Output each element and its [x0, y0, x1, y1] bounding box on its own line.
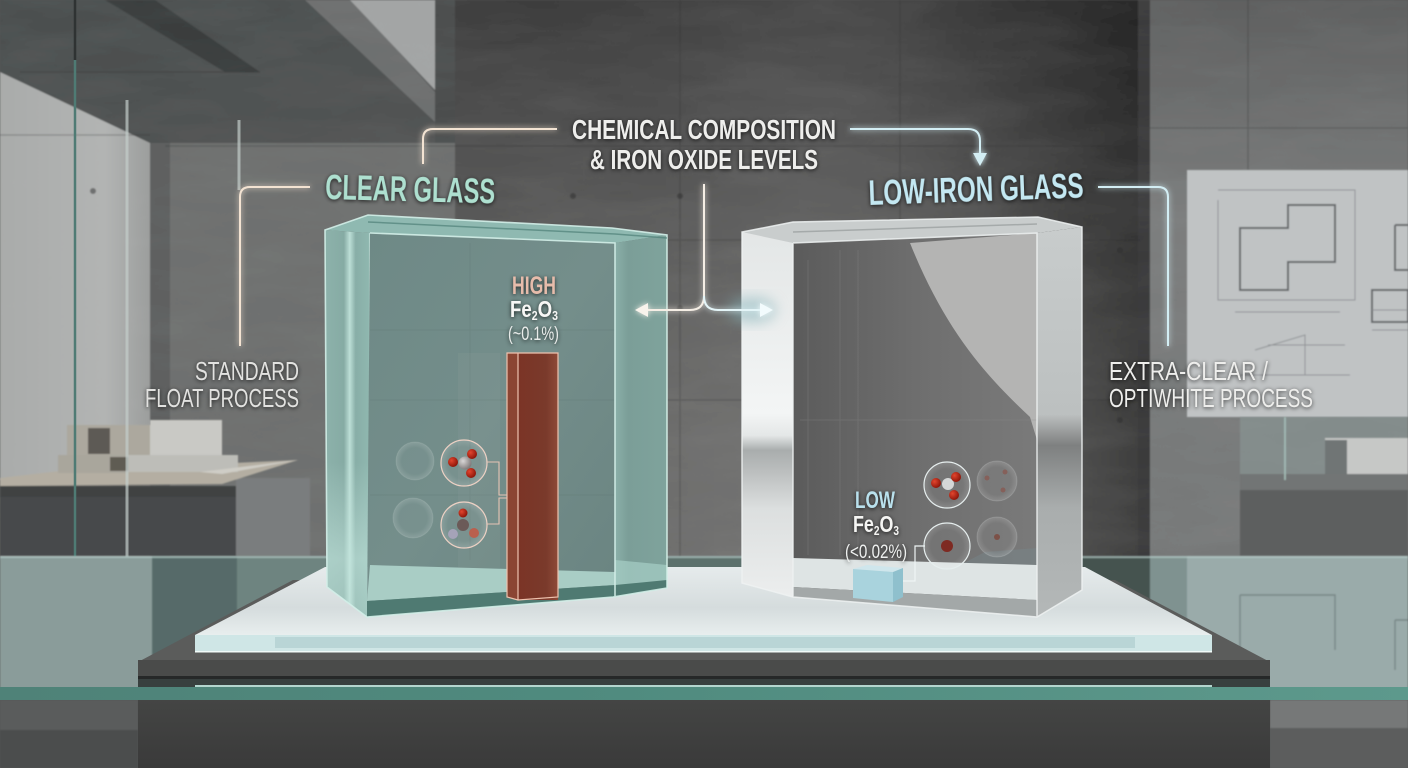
- glass block body: low-iron glass: [742, 217, 1082, 617]
- heading: low-iron glass: LOW-IRON GLASS: [868, 167, 1084, 213]
- background: left table with architectural model: [0, 420, 310, 556]
- label: high Fe2O3: 2: [532, 308, 538, 323]
- panel: clear glass block: [325, 215, 667, 617]
- panel: low-iron glass block: [742, 217, 1082, 617]
- faded molecules: [977, 461, 1017, 557]
- whiteboard with architectural drawings: [1187, 170, 1408, 417]
- background: architectural interior: [0, 0, 1408, 563]
- left glass partition: [75, 0, 239, 690]
- title: chemical composition and iron oxide levels: [572, 114, 836, 175]
- label: standard float process: STANDARD: [195, 356, 299, 386]
- label: low Fe2O3: (<0.02%): [845, 542, 907, 563]
- display pedestal: [0, 580, 1408, 768]
- connector: clear glass to standard float process: [240, 187, 310, 346]
- label: standard float process: FLOAT PROCESS: [145, 383, 299, 413]
- red bar: high iron oxide: [507, 353, 558, 600]
- molecule: iron oxide cluster bottom: [441, 502, 487, 548]
- molecule: low iron bottom: [924, 523, 970, 569]
- background: right display table: [1240, 417, 1408, 556]
- label: low Fe2O3: LOW: [855, 487, 895, 514]
- connector: low-iron glass to extra-clear process: [1098, 187, 1168, 346]
- molecule: iron oxide cluster top: [441, 440, 487, 486]
- label: extra-clear optiwhite process: [1109, 356, 1313, 413]
- label: low Fe2O3: 3: [893, 523, 899, 538]
- connector: top-left to clear glass: [423, 129, 557, 164]
- faded molecules: [393, 442, 434, 538]
- title: chemical composition and iron oxide levels: CHEMICAL COMPOSITION: [572, 114, 836, 145]
- label: high Fe2O3: [508, 272, 559, 345]
- molecule connector: [903, 546, 925, 581]
- molecule connector: [487, 462, 507, 524]
- glass shelf and floor: [0, 556, 1408, 768]
- title: chemical composition and iron oxide levels: & IRON OXIDE LEVELS: [590, 144, 818, 175]
- label: low Fe2O3: 2: [874, 523, 879, 538]
- arrows: composition split to both glass blocks: [635, 184, 773, 317]
- arrow: composition to low-iron glass: [850, 129, 987, 166]
- label: low Fe2O3: [845, 487, 907, 563]
- label: high Fe2O3: 3: [552, 308, 558, 323]
- small blue cube: low iron oxide: [853, 565, 903, 602]
- white glass slab base: [195, 567, 1212, 652]
- label: high Fe2O3: O: [538, 296, 552, 322]
- label: standard float process: [145, 356, 299, 413]
- label: high Fe2O3: HIGH: [512, 272, 556, 300]
- molecule: low iron top: [924, 462, 970, 508]
- label: extra-clear optiwhite process: EXTRA-CLEAR /: [1109, 356, 1269, 386]
- heading: clear glass: CLEAR GLASS: [325, 168, 496, 211]
- label: extra-clear optiwhite process: OPTIWHITE PROCESS: [1109, 383, 1313, 413]
- label: high Fe2O3: Fe: [510, 296, 537, 322]
- label: high Fe2O3: (~0.1%): [508, 324, 559, 345]
- ghost bar: [458, 353, 500, 568]
- glass block body: clear glass: [325, 215, 667, 617]
- label: low Fe2O3: O: [879, 511, 893, 537]
- glow behind right arrowhead: [728, 297, 776, 323]
- label: low Fe2O3: Fe: [853, 511, 880, 537]
